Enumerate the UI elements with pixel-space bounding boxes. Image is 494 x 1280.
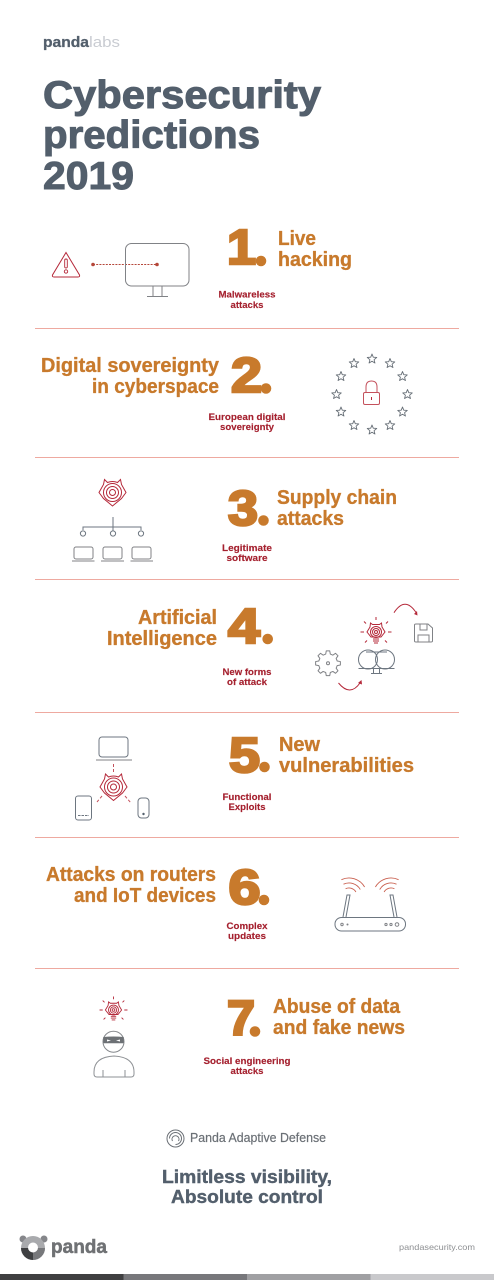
icon: AI idea, gear, binoculars, floppy	[316, 604, 432, 690]
subheading: Complex	[226, 921, 268, 932]
brand: pandalabs	[43, 34, 120, 51]
heading: Artificial	[138, 606, 217, 629]
subheading: of attack	[227, 677, 268, 688]
heading: New	[279, 733, 320, 756]
number 2: 2	[231, 349, 262, 403]
panel: prediction 4	[107, 600, 432, 690]
icon: masked hacker with idea	[94, 996, 134, 1077]
panel: prediction 6	[46, 861, 406, 942]
heading	[41, 354, 220, 398]
number 4: 4	[228, 600, 260, 654]
number 1	[227, 221, 266, 275]
footer logo: panda	[20, 1236, 107, 1260]
panel: prediction 5	[76, 729, 414, 820]
subheading	[222, 543, 272, 564]
heading: attacks	[277, 507, 344, 530]
number 6	[228, 861, 269, 915]
heading	[46, 863, 216, 907]
heading: and fake news	[273, 1016, 405, 1039]
footer colour bar	[0, 1274, 494, 1280]
heading: vulnerabilities	[279, 754, 414, 777]
footer logo: panda: panda	[51, 1237, 107, 1258]
subheading: updates	[228, 931, 266, 942]
subheading	[218, 290, 276, 311]
subheading	[226, 921, 268, 942]
icon: ring of stars with padlock	[332, 354, 412, 434]
heading: hacking	[278, 248, 352, 271]
heading: Intelligence	[107, 627, 217, 650]
heading: Attacks on routers	[46, 863, 216, 886]
heading	[278, 227, 352, 271]
title: 2019	[43, 155, 134, 198]
heading: Abuse of data	[273, 995, 401, 1018]
slogan: Absolute control	[171, 1187, 323, 1207]
number 6: 6	[228, 861, 260, 915]
product logo: Panda Adaptive Defense	[167, 1130, 326, 1147]
heading: Live	[278, 227, 316, 250]
number 4	[228, 600, 273, 654]
title: Cybersecurity	[43, 74, 322, 117]
icon: threat over network of laptops	[72, 480, 153, 561]
subheading	[208, 412, 286, 433]
product logo: Panda Adaptive Defense: Panda Adaptive Defense	[190, 1131, 326, 1145]
number 3	[228, 482, 269, 536]
subheading	[204, 1056, 291, 1077]
heading: Digital sovereignty	[41, 354, 220, 377]
subheading: Social engineering	[204, 1056, 291, 1067]
subheading: Functional	[222, 792, 272, 803]
slogan	[162, 1167, 332, 1207]
website: pandasecurity.com	[399, 1242, 475, 1252]
subheading: European digital	[208, 412, 286, 423]
brand: pandalabs: panda	[43, 34, 90, 51]
number 7: 7	[227, 992, 255, 1046]
slogan: Limitless visibility,	[162, 1167, 332, 1187]
heading: Supply chain	[277, 486, 397, 509]
heading: in cyberspace	[92, 375, 219, 398]
subheading: Malwareless	[218, 290, 276, 300]
number 5: 5	[229, 729, 260, 783]
subheading: Legitimate	[222, 543, 272, 554]
heading	[107, 606, 217, 650]
heading	[279, 733, 414, 777]
subheading: sovereignty	[220, 422, 275, 433]
icon: wifi router	[335, 878, 406, 931]
subheading: attacks	[230, 1066, 264, 1077]
number 5	[229, 729, 270, 783]
panel: prediction 1	[52, 221, 352, 311]
panel: prediction 7	[94, 992, 405, 1077]
title: predictions	[43, 114, 260, 157]
number 3: 3	[228, 482, 258, 536]
panel: prediction 3	[72, 480, 397, 564]
subheading	[222, 792, 272, 813]
brand: pandalabs: labs	[89, 34, 120, 51]
title	[43, 74, 322, 198]
subheading: New forms	[222, 667, 272, 678]
heading	[273, 995, 405, 1039]
number 1: 1	[227, 221, 256, 275]
heading	[277, 486, 397, 530]
panel: prediction 2	[41, 349, 412, 434]
icon: threat exploiting devices	[76, 737, 149, 820]
number 2	[231, 349, 271, 403]
subheading: software	[226, 553, 268, 564]
subheading: attacks	[230, 300, 264, 311]
subheading	[222, 667, 272, 688]
heading: and IoT devices	[74, 884, 216, 907]
icon: alert sent to monitor	[52, 244, 189, 296]
subheading: Exploits	[228, 802, 266, 813]
